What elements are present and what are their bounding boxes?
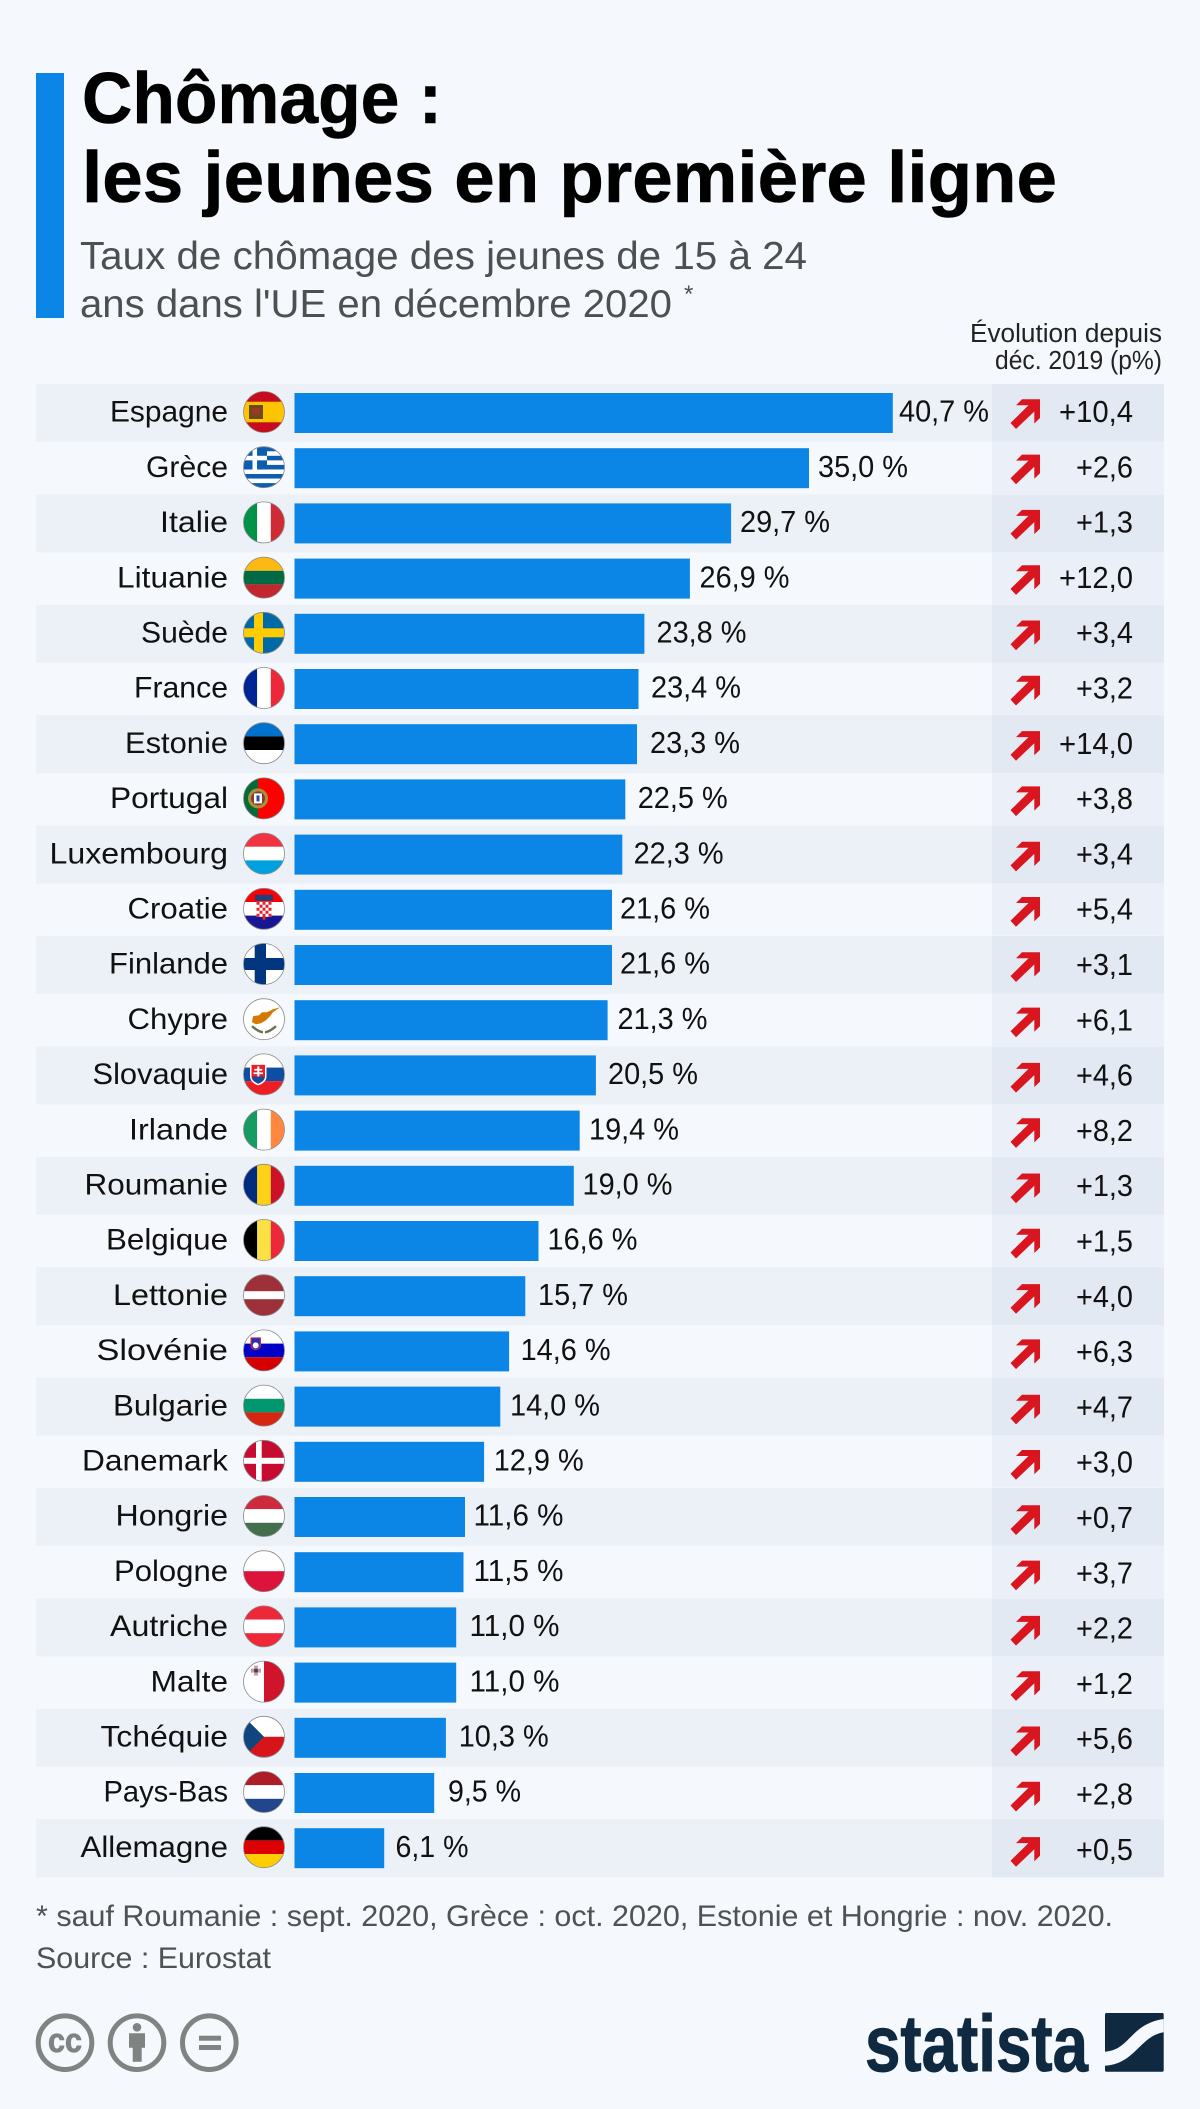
arrow (1010, 1284, 1040, 1314)
change: +2,6 (1076, 450, 1133, 484)
arrow (1010, 1450, 1040, 1480)
bar (294, 1663, 456, 1703)
bar (294, 779, 625, 819)
label: Croatie (128, 892, 228, 926)
arrow (1010, 1395, 1040, 1424)
change: +8,2 (1076, 1114, 1133, 1148)
arrow (1010, 1505, 1040, 1535)
change: +3,8 (1076, 782, 1133, 816)
bar (294, 1166, 574, 1206)
change: +10,4 (1059, 395, 1133, 429)
bar (294, 559, 690, 599)
bar (294, 1828, 384, 1868)
change: +6,3 (1076, 1335, 1133, 1369)
arrow (1010, 455, 1040, 484)
change: +3,1 (1076, 948, 1133, 982)
change: +14,0 (1059, 727, 1133, 761)
label: Tchéquie (100, 1721, 228, 1754)
flag: Greece (243, 446, 285, 488)
bar (294, 1276, 525, 1316)
subtitle: ans dans l'UE en décembre 2020 (80, 283, 672, 326)
bar (294, 1221, 538, 1261)
value: 35,0 % (818, 450, 908, 484)
value: 12,9 % (494, 1444, 584, 1478)
flag: Hungary (243, 1495, 285, 1537)
flag: Denmark (243, 1440, 285, 1482)
arrow (1010, 676, 1040, 706)
label: Hongrie (116, 1500, 228, 1533)
row: Belgique (106, 1214, 1164, 1267)
bar (294, 835, 622, 875)
row: Allemagne (36, 1819, 1164, 1877)
value: 26,9 % (700, 560, 790, 594)
footnote and source: * sauf Roumanie : sept. 2020, Grèce : oct. 2020, Estonie et Hongrie : nov. 2020. (36, 1900, 1113, 1933)
arrow (1010, 952, 1040, 982)
arrow (1010, 1726, 1040, 1756)
label: Pologne (114, 1555, 228, 1588)
bar (294, 945, 612, 985)
arrow (1010, 1561, 1040, 1590)
flag: Czechia (243, 1716, 285, 1758)
label: Italie (160, 506, 228, 539)
bar (294, 1387, 500, 1427)
title accent bar (36, 73, 64, 318)
bar (294, 890, 612, 930)
flag: Spain (243, 391, 285, 433)
arrow (1010, 1174, 1040, 1203)
value: 11,5 % (474, 1554, 564, 1588)
row: France (134, 662, 1164, 715)
row: Hongrie (36, 1488, 1164, 1546)
value: 23,3 % (650, 726, 740, 760)
value: 23,4 % (651, 671, 741, 705)
flag: Ireland (243, 1109, 285, 1151)
bar (294, 1331, 509, 1371)
arrow (1010, 510, 1040, 540)
label: Pays-Bas (104, 1776, 228, 1809)
bar (294, 1773, 434, 1813)
row: Luxembourg (36, 826, 1164, 884)
flag: Estonia (243, 722, 285, 764)
value: 11,6 % (474, 1499, 564, 1533)
value: 21,3 % (618, 1002, 708, 1036)
title (82, 59, 1057, 218)
bar (294, 1497, 465, 1537)
arrow (1010, 1671, 1040, 1701)
flag: Netherlands (243, 1771, 285, 1813)
flag: Sweden (243, 612, 285, 654)
row: Irlande (129, 1104, 1164, 1156)
label: Malte (150, 1665, 228, 1698)
change: +4,7 (1076, 1390, 1133, 1424)
change: +3,2 (1076, 672, 1133, 706)
change: +4,0 (1076, 1280, 1133, 1314)
bar (294, 448, 809, 488)
change: +5,4 (1076, 893, 1133, 927)
change: +5,6 (1076, 1722, 1133, 1756)
arrow (1010, 1229, 1040, 1258)
label: Slovaquie (92, 1058, 228, 1091)
change: +3,0 (1076, 1446, 1133, 1480)
value: 29,7 % (740, 505, 830, 539)
arrow (1010, 1008, 1040, 1037)
subtitle: * (684, 281, 693, 308)
label: Belgique (106, 1224, 228, 1257)
row: Portugal (110, 773, 1164, 825)
arrow (1010, 1782, 1040, 1812)
bar (294, 1442, 484, 1482)
value: 10,3 % (459, 1720, 549, 1754)
bar (294, 614, 644, 654)
arrow (1010, 897, 1040, 927)
arrow (1010, 1616, 1040, 1646)
bar (294, 1718, 446, 1758)
label: Autriche (110, 1610, 228, 1643)
bar (294, 669, 638, 709)
column header: evolution (970, 319, 1162, 375)
value: 22,3 % (634, 836, 724, 870)
subtitle (80, 235, 807, 326)
change: +1,5 (1076, 1224, 1133, 1258)
flag: Italy (243, 501, 285, 543)
value: 9,5 % (448, 1775, 521, 1809)
subtitle: Taux de chômage des jeunes de 15 à 24 (80, 235, 807, 278)
row: Pologne (114, 1546, 1164, 1598)
value: 19,0 % (582, 1168, 672, 1202)
row: Croatie (128, 883, 1164, 936)
label: Espagne (110, 396, 228, 429)
row: Estonie (36, 715, 1164, 773)
bar (294, 503, 731, 543)
flag: Slovenia (243, 1329, 285, 1371)
flag: Slovakia (243, 1053, 285, 1095)
label: Bulgarie (113, 1389, 228, 1422)
label: Portugal (110, 782, 228, 815)
flag: Cyprus (243, 998, 285, 1040)
change: +0,7 (1076, 1501, 1133, 1535)
value: 40,7 % (899, 395, 989, 429)
footnote and source: Source : Eurostat (36, 1942, 272, 1975)
arrow (1010, 842, 1040, 871)
label: Estonie (125, 727, 228, 760)
flag: Austria (243, 1605, 285, 1647)
row: Malte (150, 1656, 1164, 1708)
row: Italie (36, 494, 1164, 552)
change: +12,0 (1059, 561, 1133, 595)
row: Pays-Bas (104, 1766, 1164, 1819)
change: +2,8 (1076, 1778, 1133, 1812)
bar (294, 1607, 456, 1647)
label: Roumanie (84, 1168, 228, 1202)
value: 23,8 % (656, 616, 746, 650)
change: +2,2 (1076, 1612, 1133, 1646)
label: Grèce (146, 451, 228, 484)
value: 11,0 % (470, 1664, 560, 1698)
value: 14,6 % (521, 1333, 611, 1367)
value: 21,6 % (620, 892, 710, 926)
value: 16,6 % (548, 1223, 638, 1257)
row: Espagne (36, 384, 1164, 442)
bar (294, 1055, 596, 1095)
flag: Luxembourg (243, 833, 285, 875)
arrow (1010, 1118, 1040, 1148)
change: +1,3 (1076, 1169, 1133, 1203)
flag: Malta (243, 1661, 285, 1703)
arrow (1010, 620, 1040, 650)
label: Irlande (129, 1113, 228, 1146)
label: Slovénie (96, 1334, 228, 1367)
flag: France (243, 667, 285, 709)
arrow (1010, 786, 1040, 816)
change: +1,2 (1076, 1667, 1133, 1701)
row: Suède (36, 605, 1164, 663)
footnote and source (36, 1900, 1113, 1975)
row: Bulgarie (36, 1378, 1164, 1436)
title: Chômage : (82, 59, 442, 139)
label: Luxembourg (50, 837, 228, 870)
column header: evolution: déc. 2019 (p%) (995, 347, 1162, 375)
change: +1,3 (1076, 506, 1133, 540)
change: +3,7 (1076, 1556, 1133, 1590)
flag: Lithuania (243, 557, 285, 599)
change: +3,4 (1076, 837, 1133, 871)
label: Allemagne (80, 1831, 228, 1864)
bar (294, 393, 893, 433)
value: 6,1 % (396, 1830, 468, 1864)
flag: Finland (243, 943, 285, 985)
row: Danemark (82, 1435, 1164, 1488)
column header: evolution: Évolution depuis (970, 319, 1162, 348)
row: Lituanie (117, 552, 1164, 604)
icon: creative commons licence (38, 2016, 236, 2070)
row: Chypre (128, 994, 1164, 1046)
row: Autriche (36, 1598, 1164, 1656)
bar (294, 1111, 580, 1151)
change: +4,6 (1076, 1059, 1133, 1093)
row: Lettonie (36, 1267, 1164, 1325)
title: les jeunes en première ligne (82, 138, 1057, 218)
label: Lituanie (117, 561, 228, 594)
change: +3,4 (1076, 616, 1133, 650)
arrow (1010, 1837, 1040, 1867)
flag: Croatia (243, 888, 285, 930)
row: Grèce (146, 442, 1164, 494)
value: 14,0 % (510, 1388, 600, 1422)
flag: Latvia (243, 1274, 285, 1316)
label: Lettonie (113, 1279, 228, 1312)
arrow (1010, 399, 1040, 429)
value: 11,0 % (470, 1609, 560, 1643)
arrow (1010, 565, 1040, 595)
arrow (1010, 731, 1040, 761)
flag: Bulgaria (243, 1385, 285, 1427)
row: Roumanie (36, 1157, 1164, 1215)
row: Tchéquie (36, 1709, 1164, 1767)
arrow (1010, 1339, 1040, 1369)
row: Slovénie (96, 1325, 1164, 1377)
flag: Germany (243, 1826, 285, 1868)
statista logo: statista (865, 1999, 1088, 2088)
label: Danemark (82, 1445, 229, 1478)
bar (294, 1000, 608, 1040)
label: Finlande (109, 948, 228, 981)
arrow (1010, 1063, 1040, 1093)
value: 22,5 % (638, 781, 728, 815)
bar (294, 1552, 464, 1592)
flag: Belgium (243, 1219, 285, 1261)
bar (294, 724, 637, 764)
value: 15,7 % (538, 1278, 628, 1312)
change: +6,1 (1076, 1003, 1133, 1037)
label: France (134, 672, 228, 705)
value: 19,4 % (589, 1112, 679, 1146)
row: Slovaquie (36, 1046, 1164, 1104)
value: 20,5 % (608, 1057, 698, 1091)
label: Chypre (128, 1003, 228, 1036)
value: 21,6 % (620, 947, 710, 981)
change: +0,5 (1076, 1833, 1133, 1867)
icon: creative commons licence: cc (48, 2022, 82, 2060)
row: Finlande (36, 936, 1164, 994)
flag: Poland (243, 1550, 285, 1592)
label: Suède (141, 617, 228, 650)
flag: Portugal (243, 777, 285, 819)
flag: Romania (243, 1164, 285, 1206)
